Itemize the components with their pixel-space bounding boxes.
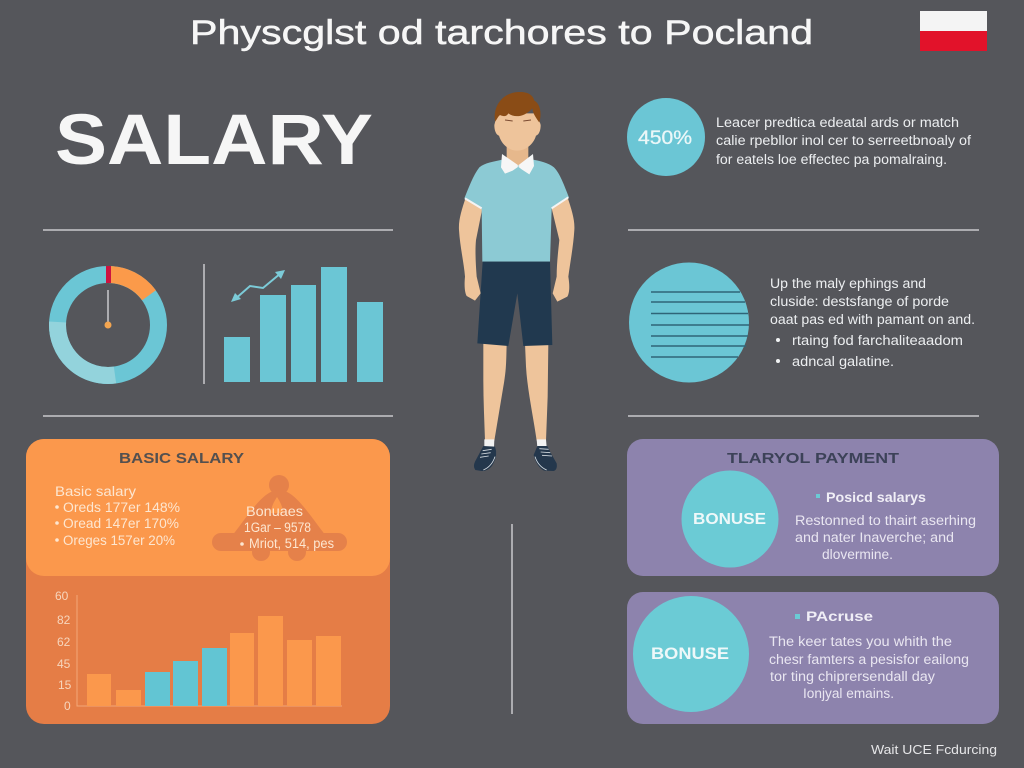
text block: salary list: Basic salary: [55, 484, 136, 499]
text block: pacruse: [769, 608, 969, 701]
arms: [459, 197, 574, 302]
text block: posted salaries: Posicd salarys: [826, 489, 926, 505]
panel: payment: [627, 439, 999, 576]
collar: [501, 154, 534, 174]
text block: posted salaries: dlovermine.: [822, 547, 893, 562]
text block: intro: calie rpebllor inol cer to serreetbnoaly of: [716, 133, 971, 148]
text block: bonuses: 1Gar – 9578: [244, 520, 311, 535]
text block: intro: [716, 115, 971, 167]
text block: details: cluside: destsfange of porde: [770, 294, 949, 309]
text block: salary list: [55, 484, 180, 548]
icon: trend arrow: [231, 270, 285, 302]
shoes: [474, 446, 557, 471]
shirt: [464, 159, 569, 262]
sleeve trim: [465, 197, 568, 208]
text block: pacruse: PAcruse: [806, 608, 873, 624]
chart: orange and teal bars: [55, 589, 342, 713]
text block: salary list: Oreds 177er 148%: [63, 500, 180, 515]
text block: details: rtaing fod farchaliteaadom: [792, 333, 963, 348]
neck and head: [507, 140, 528, 167]
text block: posted salaries: and nater Inaverche; and: [795, 530, 954, 545]
chart: orange and teal bars: 82: [57, 613, 71, 627]
figure: person: [459, 92, 574, 471]
heading: salary: SALARY: [55, 101, 373, 180]
chart: orange and teal bars: 15: [58, 678, 72, 692]
text block: bonuses: [240, 504, 334, 551]
text block: pacruse: The keer tates you whith the: [769, 634, 952, 649]
text block: intro: for eatels loe effectec pa pomalraing.: [716, 152, 947, 167]
text block: salary list: Oread 147er 170%: [63, 516, 179, 531]
panel: basic salary: [26, 439, 390, 724]
title: Physcglst od tarchores to Pocland: [190, 14, 813, 52]
chart: teal bars with arrow: [224, 267, 383, 382]
footer note: Wait UCE Fcdurcing: [871, 742, 997, 757]
badge: bonus: BONUSE: [693, 511, 766, 528]
eyes: [505, 118, 531, 122]
stat circle: 450%: [638, 128, 692, 149]
chart: orange and teal bars: 60: [55, 589, 69, 603]
text block: intro: Leacer predtica edeatal ards or match: [716, 115, 959, 130]
heading: basic salary: BASIC SALARY: [119, 450, 244, 467]
text block: posted salaries: Restonned to thairt aserhing: [795, 513, 976, 528]
heading: payment: TLARYOL PAYMENT: [727, 450, 899, 467]
icon: triangle emblem: [212, 475, 347, 561]
legs: [483, 343, 548, 441]
chart: orange and teal bars: 62: [57, 635, 71, 649]
text block: pacruse: Ionjyal emains.: [803, 686, 894, 701]
text block: details: Up the maly ephings and: [770, 276, 926, 291]
icon: lined circle: [629, 262, 749, 382]
shorts: [477, 262, 552, 346]
text block: details: adncal galatine.: [792, 354, 894, 369]
chart: orange and teal bars: 45: [57, 657, 71, 671]
chart: donut gauge: [58, 266, 158, 376]
socks: [484, 439, 547, 447]
text block: bonuses: Bonuaes: [246, 504, 303, 519]
panel: bonus: [627, 592, 999, 724]
text block: pacruse: tor ting chiprersendall day: [770, 669, 935, 684]
text block: details: [770, 276, 975, 369]
text block: pacruse: chesr famters a pesisfor eailong: [769, 652, 969, 667]
stat circle: [627, 98, 705, 176]
badge: bonus: [682, 470, 778, 568]
chart: orange and teal bars: 0: [64, 699, 71, 713]
text block: bonuses: Mriot, 514, pes: [249, 536, 334, 551]
badge: bonus: BONUSE: [651, 645, 729, 663]
icon: Polish flag: [920, 11, 987, 51]
badge: bonus: [633, 596, 749, 712]
text block: details: oaat pas ed with pamant on and.: [770, 312, 975, 327]
text block: salary list: Oreges 157er 20%: [63, 533, 175, 548]
text block: posted salaries: [795, 489, 976, 562]
hair: [495, 92, 541, 123]
